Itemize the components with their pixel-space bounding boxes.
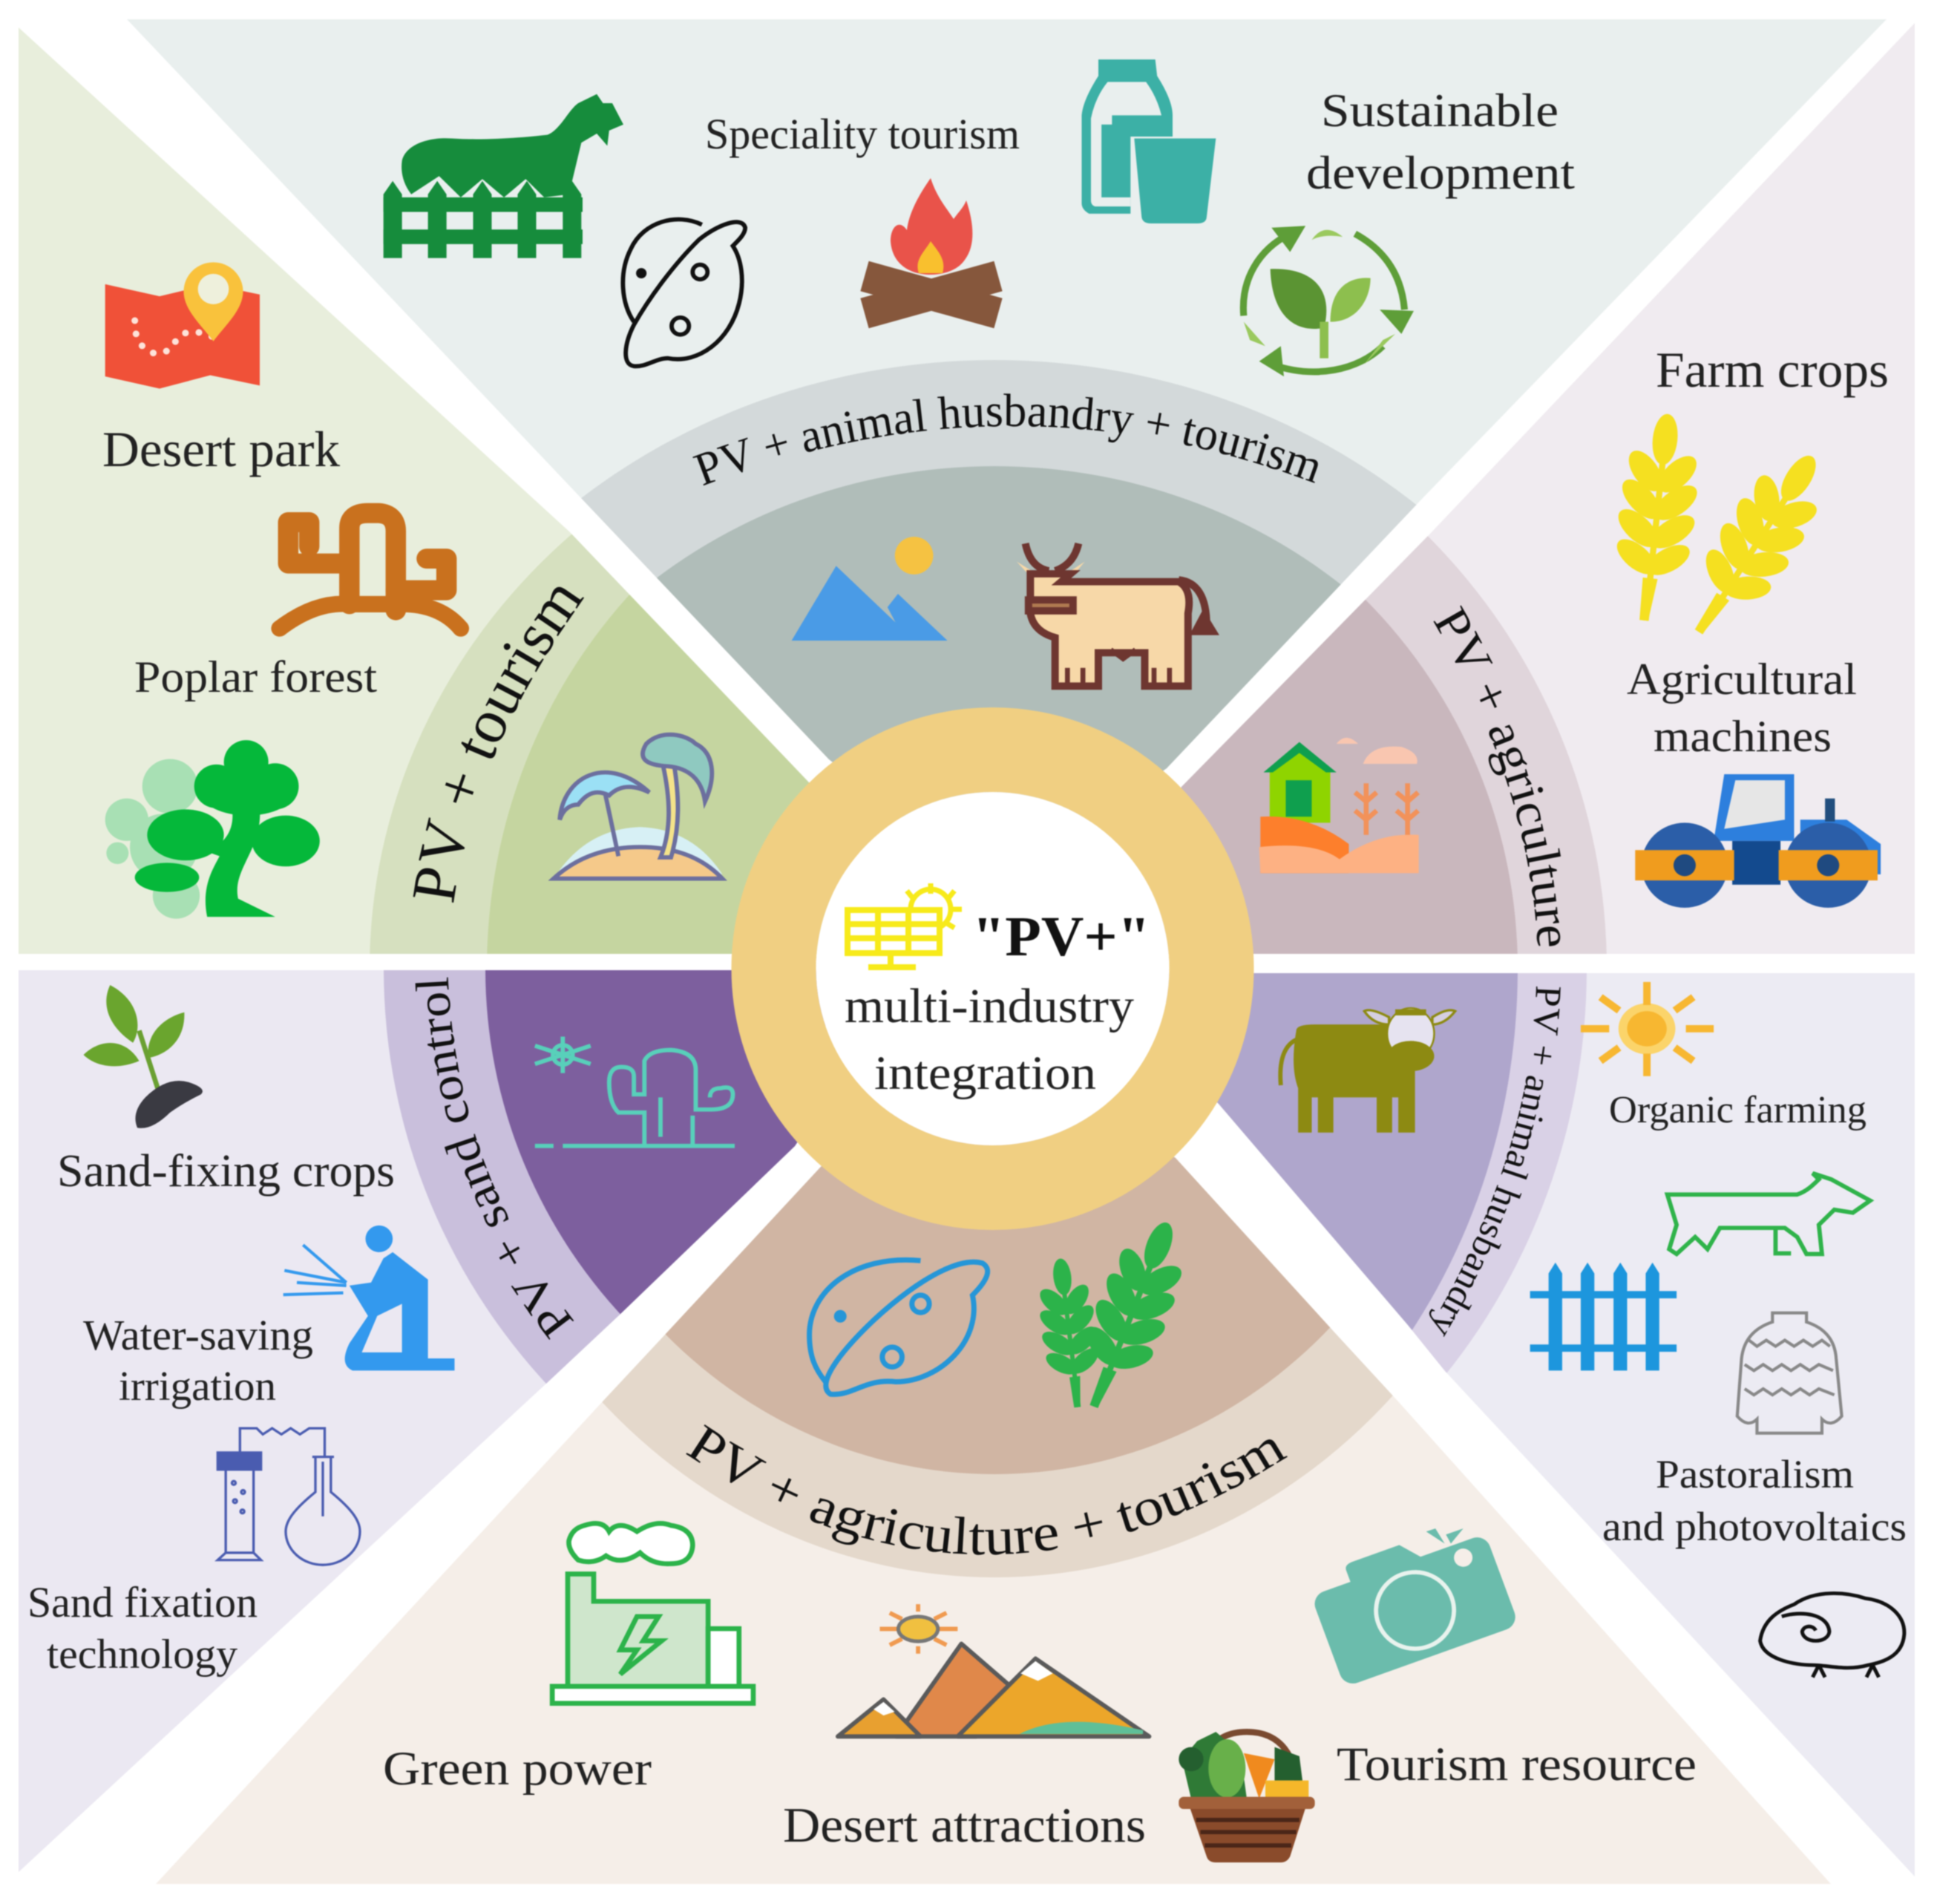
- band label: PV + agriculture + tourism: PV + agriculture + tourism: [686, 1424, 1288, 1556]
- label: machines: machines: [1654, 712, 1832, 761]
- icon: tree: [105, 740, 320, 919]
- icon: sweater: [1737, 1313, 1842, 1433]
- icon: goat behind fence: [384, 94, 623, 258]
- icon: sheep: [1760, 1593, 1904, 1678]
- center heading: "PV+": [972, 906, 1150, 968]
- band label: PV + animal husbandry: PV + animal husbandry: [1428, 986, 1561, 1338]
- icon: blue mountain and sun: [792, 537, 948, 641]
- label: Sand-fixing crops: Sand-fixing crops: [57, 1146, 395, 1197]
- icon: goat outline: [1668, 1174, 1870, 1254]
- icon: beige cow: [1017, 543, 1213, 686]
- label: Sand fixation: Sand fixation: [27, 1578, 258, 1626]
- panel: PV + sand control: [19, 969, 825, 1872]
- label: development: development: [1306, 146, 1575, 199]
- label: Speciality tourism: Speciality tourism: [705, 110, 1020, 158]
- center text line 1: multi-industry: [845, 979, 1134, 1033]
- label: Agricultural: Agricultural: [1627, 655, 1857, 704]
- icon: green power factory: [552, 1523, 753, 1704]
- icon: teal cactus: [535, 1037, 735, 1146]
- icon: tractor: [1635, 774, 1881, 908]
- label: and photovoltaics: and photovoltaics: [1602, 1504, 1907, 1549]
- icon: olive cow: [1280, 1008, 1455, 1133]
- band label: PV + sand control: PV + sand control: [414, 977, 574, 1341]
- label: Poplar forest: Poplar forest: [134, 652, 377, 701]
- panel: PV + tourism: [18, 28, 810, 955]
- icon: beach umbrella and palm: [554, 735, 722, 879]
- label: Green power: Green power: [383, 1742, 652, 1796]
- central ring: [773, 750, 1211, 1188]
- label: Organic farming: Organic farming: [1609, 1089, 1866, 1131]
- icon: campfire: [865, 178, 998, 313]
- icon: map with pin: [105, 262, 260, 389]
- panel: PV + animal husbandry + tourism: [128, 19, 1886, 771]
- label: irrigation: irrigation: [119, 1364, 276, 1410]
- icon: solar panel: [848, 883, 962, 967]
- icon: barn and fields: [1259, 738, 1419, 873]
- label: Water-saving: Water-saving: [83, 1311, 313, 1359]
- icon: planet black: [623, 220, 745, 366]
- panel: PV + agriculture + tourism: [156, 1141, 1830, 1884]
- icon: vegetable basket: [1179, 1732, 1315, 1862]
- icon: lab flask and tube: [217, 1428, 360, 1565]
- icon: sapling: [83, 985, 203, 1128]
- panel: PV + agriculture: [1180, 24, 1915, 955]
- central white disc: [816, 792, 1170, 1145]
- icon: orange cactus: [280, 513, 461, 629]
- icon: irrigation person: [283, 1226, 454, 1370]
- icon: recycle leaves: [1243, 226, 1414, 376]
- label: Sustainable: Sustainable: [1321, 84, 1559, 137]
- band label: PV + agriculture: PV + agriculture: [1432, 604, 1561, 947]
- label: technology: technology: [47, 1632, 237, 1678]
- icon: yellow wheat: [1602, 410, 1850, 655]
- icon: sun orange: [1581, 982, 1714, 1076]
- icon: milk bottle and cup: [1081, 59, 1216, 223]
- icon: green wheat: [1029, 1208, 1207, 1422]
- label: Tourism resource: Tourism resource: [1337, 1738, 1697, 1791]
- label: Pastoralism: Pastoralism: [1656, 1452, 1854, 1496]
- label: Desert attractions: Desert attractions: [783, 1798, 1146, 1853]
- band label: PV + animal husbandry + tourism: PV + animal husbandry + tourism: [692, 393, 1319, 486]
- icon: blue fence: [1530, 1263, 1677, 1370]
- icon: blue planet: [810, 1260, 988, 1394]
- panel: PV + animal husbandry: [1217, 972, 1915, 1876]
- icon: desert mountains: [838, 1604, 1149, 1736]
- label: Desert park: Desert park: [102, 421, 340, 477]
- center text line 2: integration: [874, 1047, 1096, 1100]
- label: Farm crops: Farm crops: [1656, 341, 1889, 398]
- icon: camera: [1305, 1517, 1519, 1687]
- band label: PV + tourism: PV + tourism: [413, 586, 585, 903]
